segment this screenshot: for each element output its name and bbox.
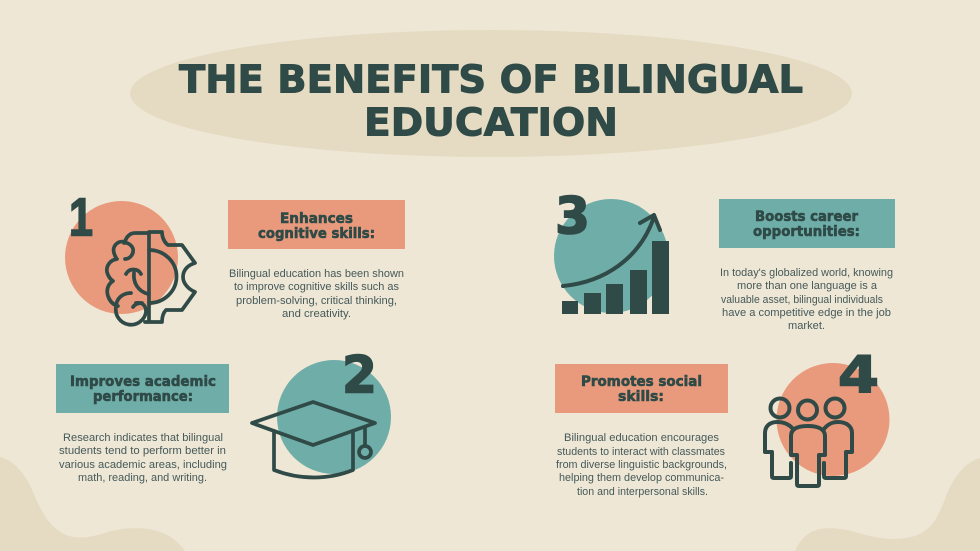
heading box: opportunities: (753, 224, 860, 240)
icon: brain and gear on coral circle (65, 201, 195, 325)
heading box: cognitive skills: (258, 226, 375, 242)
body text (59, 432, 227, 484)
title: THE BENEFITS OF BILINGUAL (179, 58, 803, 102)
number 3: 3 (555, 188, 590, 246)
body text: have a competitive edge in the job (722, 307, 891, 319)
heading box: Enhances (280, 211, 353, 227)
panel: improves academic performance (56, 346, 391, 484)
title: EDUCATION (364, 100, 618, 146)
body text (556, 432, 727, 498)
body text: tion and interpersonal skills. (577, 486, 708, 498)
heading box: performance: (93, 389, 193, 405)
body text: more than one language is a (737, 280, 878, 292)
body text: students to interact with classmates (557, 446, 725, 458)
body text (229, 268, 404, 320)
body text: In today's globalized world, knowing (720, 267, 893, 279)
body text: problem-solving, critical thinking, (236, 295, 397, 307)
panel: enhances cognitive skills (65, 188, 405, 325)
panel: boosts career opportunities (554, 188, 895, 332)
heading box (719, 199, 895, 248)
body text (720, 267, 893, 332)
heading box: Promotes social (581, 374, 702, 390)
number 4: 4 (838, 346, 879, 406)
body text: helping them develop communica- (559, 472, 724, 484)
heading box: Boosts career (755, 209, 858, 225)
number 1: 1 (69, 188, 93, 248)
body text: various academic areas, including (59, 459, 227, 471)
heading box (555, 364, 728, 413)
icon: rising bar chart on teal circle (554, 199, 669, 314)
icon: three people on coral circle (765, 363, 890, 486)
title (130, 30, 852, 157)
body text: and creativity. (282, 308, 351, 320)
body text: market. (788, 320, 825, 332)
body text: to improve cognitive skills such as (234, 281, 399, 293)
heading box (56, 364, 229, 413)
body text: Bilingual education encourages (564, 432, 720, 444)
icon: graduation cap on teal circle (252, 360, 391, 478)
heading box: Improves academic (70, 374, 216, 390)
body text: valuable asset, bilingual individuals (721, 294, 883, 306)
body text: Bilingual education has been shown (229, 268, 404, 280)
panel: promotes social skills (555, 346, 890, 498)
heading box: skills: (618, 389, 664, 405)
body text: math, reading, and writing. (78, 472, 207, 484)
body text: students tend to perform better in (59, 445, 226, 457)
heading box (228, 200, 405, 249)
number 2: 2 (342, 346, 377, 406)
body text: from diverse linguistic backgrounds, (556, 459, 727, 471)
body text: Research indicates that bilingual (63, 432, 223, 444)
